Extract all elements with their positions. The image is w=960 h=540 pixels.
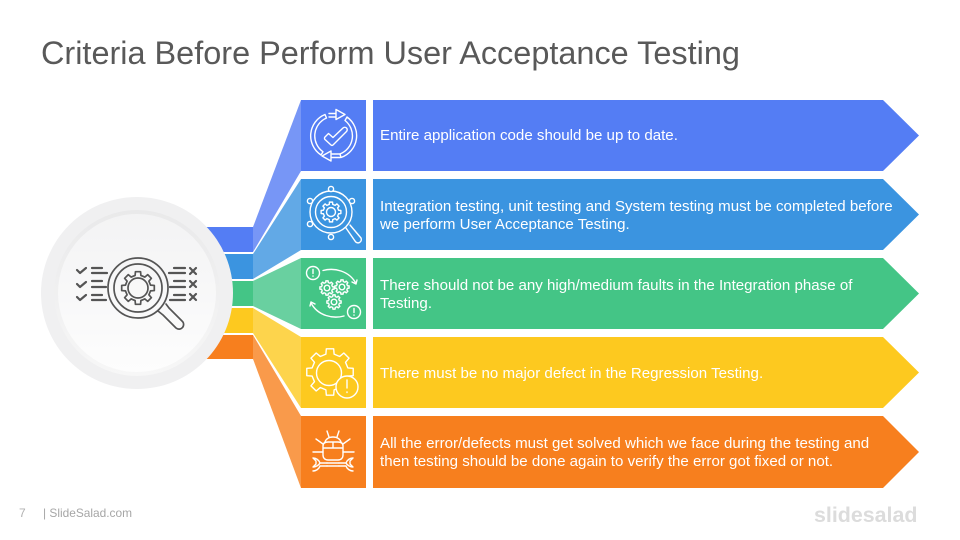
text: row 2: we perform User Acceptance Testing. [380, 216, 630, 233]
icon: magnifier with checklist [77, 258, 196, 329]
icon: refresh check [311, 110, 357, 161]
text: row 5: All the error/defects must get solved which we face during the testing and [380, 435, 869, 452]
text: row 5 [380, 435, 869, 470]
row 1 icon tile [301, 100, 366, 171]
text: row 4: There must be no major defect in the Regression Testing. [380, 365, 763, 382]
icon: gear warning [307, 349, 358, 398]
text: row 1: Entire application code should be up to date. [380, 127, 678, 144]
footer logo: slidesalad [814, 503, 917, 527]
title: Criteria Before Perform User Acceptance Testing [41, 35, 740, 71]
row 2 arrow [373, 179, 919, 250]
funnel connectors [253, 100, 301, 488]
icon: bug wrench [313, 431, 354, 471]
row 4 arrow [373, 337, 919, 408]
page number: 7 [19, 506, 26, 520]
text: row 2 [380, 198, 893, 233]
footer source: | SlideSalad.com [43, 506, 132, 520]
row 4 icon tile [301, 337, 366, 408]
icon: gears cycle with warnings [306, 266, 360, 318]
central circle [41, 197, 233, 389]
text: row 3 [380, 277, 852, 312]
text: row 5: then testing should be done again to verify the error got fixed or not. [380, 453, 833, 470]
text: row 2: Integration testing, unit testing and System testing must be completed before [380, 198, 893, 215]
row 5 icon tile [301, 416, 366, 488]
row 3 arrow [373, 258, 919, 329]
text: row 3: There should not be any high/medium faults in the Integration phase of [380, 277, 852, 294]
row 5 arrow [373, 416, 919, 488]
row 1 arrow [373, 100, 919, 171]
connector bars [190, 227, 253, 359]
icon: target gear magnifier [307, 186, 361, 243]
text: row 3: Testing. [380, 295, 432, 312]
row 3 icon tile [301, 258, 366, 329]
row 2 icon tile [301, 179, 366, 250]
